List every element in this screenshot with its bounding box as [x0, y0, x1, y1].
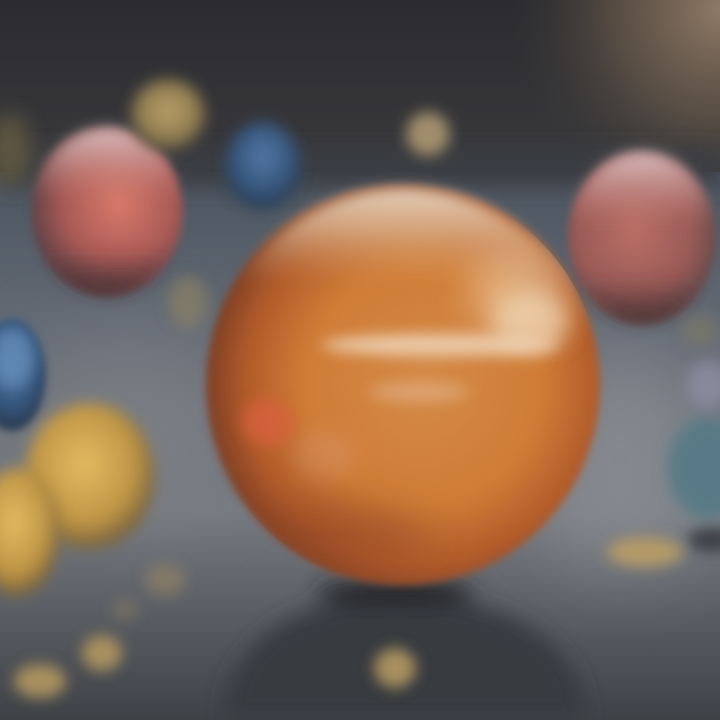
sphere: small tan far left	[0, 114, 30, 186]
sphere: teal right edge	[668, 361, 720, 552]
background: table surface	[0, 150, 720, 720]
sphere: gold left	[25, 403, 155, 549]
sphere: blue left edge	[0, 319, 46, 431]
shadow: under main sphere	[225, 580, 585, 720]
sphere: large orange	[206, 185, 600, 585]
sphere: red right	[568, 152, 716, 324]
sphere: blue upper	[225, 122, 301, 210]
sphere: red left	[31, 128, 183, 296]
blurred bead: upper centre	[406, 112, 450, 156]
background: dark wall	[0, 0, 720, 200]
sphere: gold lower left	[0, 468, 60, 596]
gold beads on table	[14, 276, 718, 698]
sphere: tan upper	[130, 79, 206, 151]
